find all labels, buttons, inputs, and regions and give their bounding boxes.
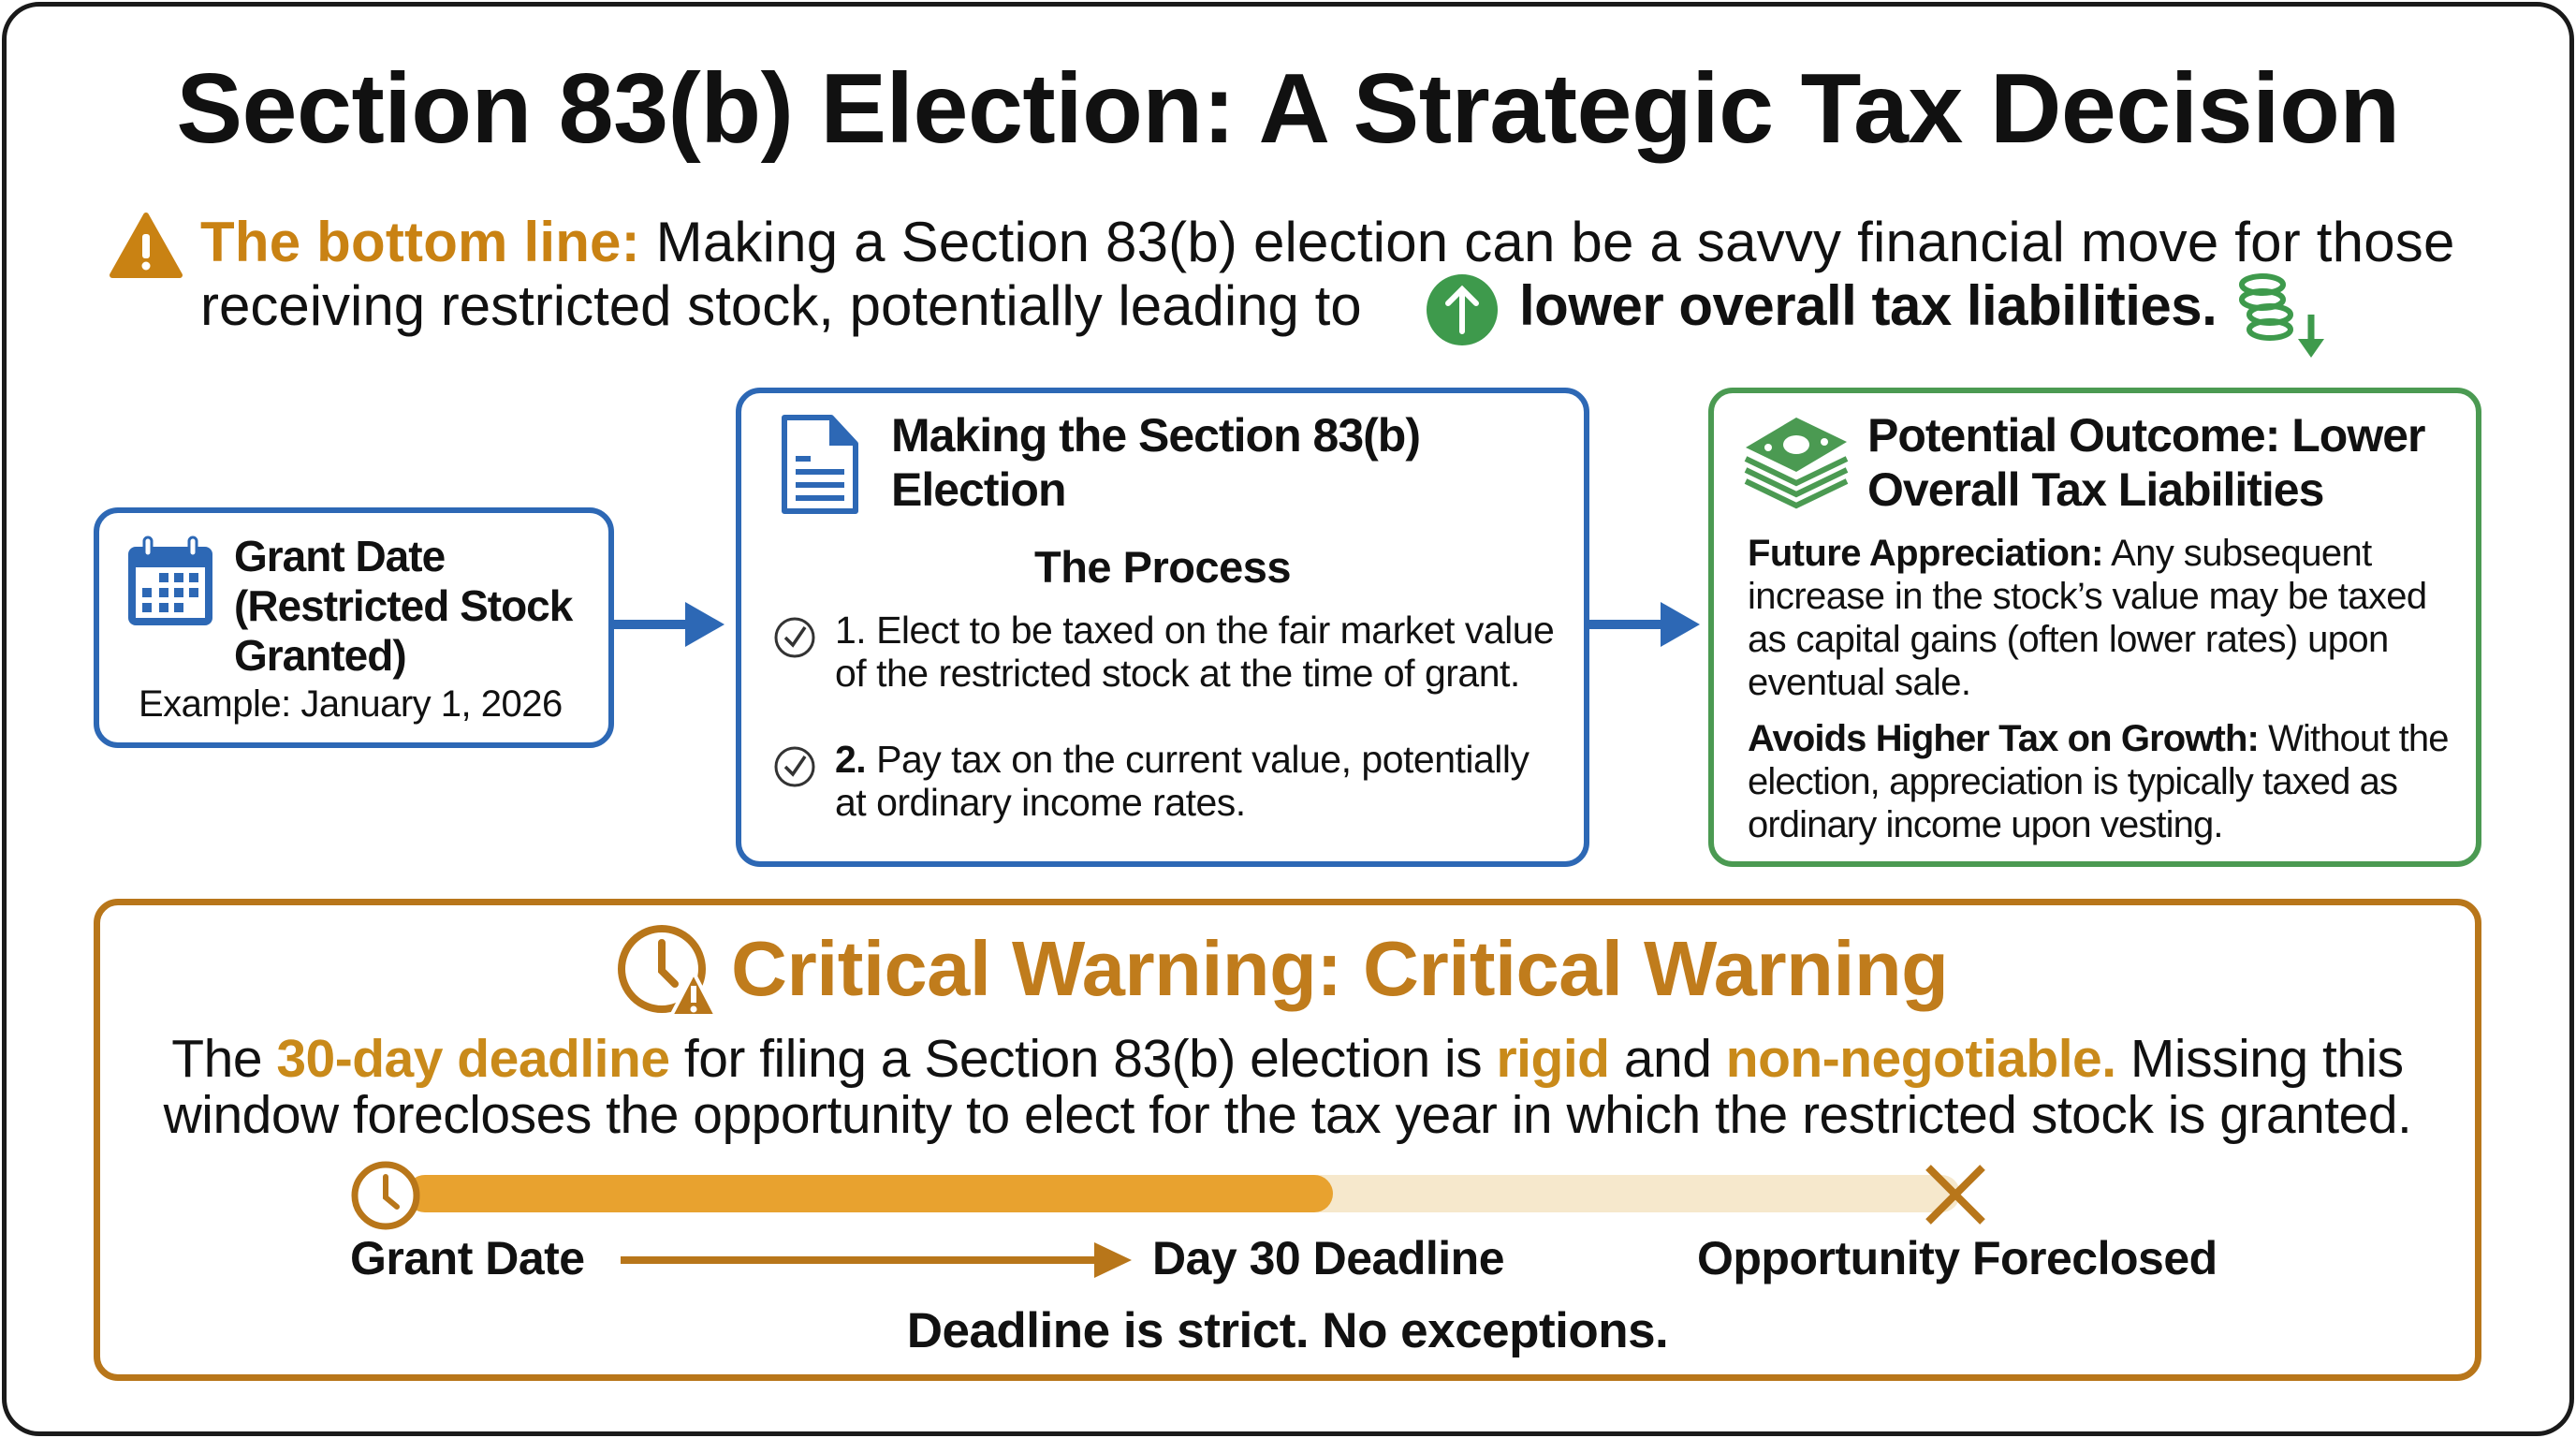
warning body text — [163, 1029, 2411, 1145]
panel: grant date: Grant Date — [234, 532, 445, 580]
bottom line text block: The bottom line: Making a Section 83(b) election can be a savvy financial move for those — [200, 211, 2455, 273]
panel: grant date — [94, 507, 614, 748]
title: Section 83(b) Election: A Strategic Tax Decision — [176, 53, 2400, 164]
icon: timeline clock — [352, 1161, 419, 1230]
arrow: election to outcome — [1589, 602, 1700, 647]
panel: potential outcome — [1708, 388, 2481, 867]
icon: coins down — [2239, 273, 2324, 358]
icon: green up arrow — [1427, 274, 1498, 345]
panel: potential outcome: Future Appreciation: Any subsequent — [1748, 533, 2372, 574]
panel: potential outcome: eventual sale. — [1748, 662, 1970, 703]
panel: critical warning — [94, 899, 2481, 1381]
closing statement: Deadline is strict. No exceptions. — [907, 1303, 1668, 1358]
warning heading: Critical Warning: Critical Warning — [731, 925, 1948, 1012]
timeline bar — [352, 1161, 1985, 1230]
panel: potential outcome: Avoids Higher Tax on Growth: Without the — [1748, 718, 2449, 759]
bottom line text block — [110, 211, 2455, 358]
panel: grant date: (Restricted Stock — [234, 581, 572, 630]
panel: potential outcome: Potential Outcome: Lower — [1867, 409, 2425, 462]
panel: potential outcome: as capital gains (often lower rates) upon — [1748, 619, 2389, 660]
timeline labels: Grant Date — [350, 1232, 585, 1284]
process step 2: at ordinary income rates. — [835, 781, 1246, 824]
panel: making the election: Making the Section 83(b) — [891, 409, 1420, 462]
panel: critical warning: Day 30 Deadline — [1152, 1232, 1504, 1284]
bottom line text block: receiving restricted stock, potentially leading to — [200, 274, 1362, 337]
panel: potential outcome: increase in the stock’s value may be taxed — [1748, 576, 2427, 617]
process step 1: of the restricted stock at the time of grant. — [835, 652, 1520, 695]
panel: making the election — [736, 388, 1589, 867]
bottom line text block: lower overall tax liabilities. — [1519, 274, 2217, 337]
warning body text: window forecloses the opportunity to elect for the tax year in which the restricted stock is granted. — [164, 1085, 2411, 1145]
process step 1: 1. Elect to be taxed on the fair market value — [835, 609, 1554, 652]
panel: making the election: The Process — [1034, 542, 1291, 592]
panel: potential outcome: ordinary income upon vesting. — [1748, 804, 2223, 845]
icon: X foreclosed — [1925, 1165, 1985, 1225]
process step 2 — [775, 738, 1530, 824]
warning body text: The 30-day deadline for filing a Section 83(b) election is rigid and non-negotiable. Missing this — [171, 1029, 2404, 1089]
panel: grant date: Granted) — [234, 631, 406, 680]
process step 2: 2. Pay tax on the current value, potentially — [835, 738, 1530, 781]
icon: check circle — [775, 747, 814, 786]
process step 1 — [775, 609, 1554, 695]
icon: calendar — [128, 536, 212, 625]
panel: critical warning: Opportunity Foreclosed — [1697, 1232, 2217, 1284]
panel: potential outcome: Overall Tax Liabilities — [1867, 463, 2323, 516]
icon: clock warning — [618, 925, 713, 1014]
icon: warning triangle — [110, 213, 183, 278]
arrow: grant to election — [614, 602, 724, 647]
panel: grant date: Example: January 1, 2026 — [139, 683, 563, 725]
icon: document — [782, 415, 858, 514]
icon: check circle — [775, 618, 814, 657]
panel: potential outcome: election, appreciation is typically taxed as — [1748, 761, 2397, 802]
arrow: timeline — [621, 1242, 1132, 1278]
icon: money stack — [1745, 418, 1848, 509]
panel: making the election: Election — [891, 463, 1065, 516]
